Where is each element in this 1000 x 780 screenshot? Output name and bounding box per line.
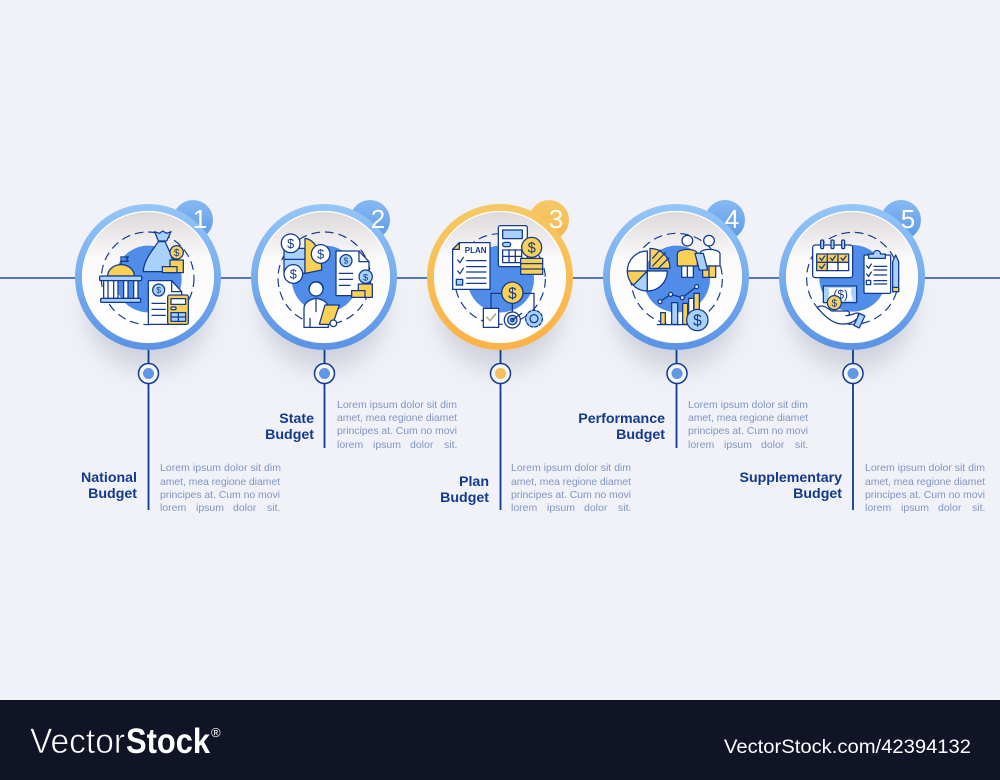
text block: Performance Budget: amet, mea regione diamet (688, 412, 808, 424)
text block: State Budget (337, 399, 457, 451)
timeline connector line (0, 277, 1000, 279)
heading: State Budget: State (279, 411, 314, 427)
text block: State Budget: principes at. Cum no movi (337, 425, 457, 437)
text block: Plan Budget: sit. (618, 502, 631, 514)
panel: State Budget (251, 200, 457, 451)
ring with white disc (427, 204, 573, 350)
text block: Supplementary Budget: lorem (865, 502, 892, 514)
text block: State Budget: lorem (337, 439, 364, 451)
icon: bank, money bag and calculator: $ (156, 285, 161, 295)
text block: Plan Budget: amet, mea regione diamet (511, 476, 631, 488)
text block: National Budget (160, 462, 281, 514)
number 4: 4 (725, 204, 739, 234)
text block: Supplementary Budget: dolor (938, 502, 962, 514)
icon: bank, money bag and calculator (100, 231, 194, 325)
text block: Supplementary Budget: amet, mea regione diamet (865, 476, 985, 488)
panel: National Budget (75, 200, 281, 514)
icon: plan, calculator and goals: PLAN (465, 246, 487, 255)
icon: pie of money, document and officer: $ (287, 237, 294, 251)
icon: calendar, checklist and money in hand (807, 232, 899, 328)
text block: Performance Budget: principes at. Cum no movi (688, 425, 808, 437)
text block: Plan Budget: ipsum (547, 502, 575, 514)
number badge 3 (529, 200, 569, 240)
icon: pie of money, document and officer (278, 232, 372, 327)
timeline node 3 (490, 364, 510, 384)
icon: pie chart, team and bar chart (627, 233, 722, 331)
number 1: 1 (193, 204, 207, 234)
icon: pie of money, document and officer: $ (344, 256, 349, 266)
text block: State Budget: amet, mea regione diamet (337, 412, 457, 424)
icon: calendar, checklist and money in hand: $ (832, 299, 838, 310)
text block: Supplementary Budget: principes at. Cum no movi (865, 489, 985, 501)
footer logo (30, 722, 210, 761)
number badge 4 (705, 200, 745, 240)
text block: Performance Budget: lorem (688, 439, 715, 451)
icon: pie chart, team and bar chart: $ (693, 313, 702, 330)
icon: plan, calculator and goals: $ (528, 241, 536, 257)
number badge 2 (350, 200, 390, 240)
heading: Supplementary Budget: Supplementary (740, 470, 842, 486)
heading: National Budget: Budget (88, 486, 137, 502)
text block: Performance Budget (688, 399, 808, 451)
text block: National Budget: Lorem ipsum dolor sit dim (160, 462, 281, 474)
text block: State Budget: dolor (410, 439, 434, 451)
heading: Plan Budget: Plan (459, 474, 489, 490)
icon: pie of money, document and officer: $ (363, 272, 369, 282)
text block: State Budget: sit. (444, 439, 457, 451)
icon: bank, money bag and calculator: $ (174, 248, 180, 259)
text block: Supplementary Budget: Lorem ipsum dolor sit dim (865, 462, 985, 474)
text block: Plan Budget: dolor (584, 502, 608, 514)
heading: State Budget: Budget (265, 427, 314, 443)
registered mark: ® (211, 725, 221, 740)
text block: National Budget: dolor (233, 502, 257, 514)
footer bar (0, 700, 1000, 780)
ring with white disc (779, 204, 925, 350)
icon: pie of money, document and officer: $ (290, 268, 297, 282)
number 2: 2 (371, 204, 385, 234)
icon: pie of money, document and officer: $ (317, 248, 324, 262)
text block: Performance Budget: ipsum (724, 439, 752, 451)
panel: Plan Budget (427, 200, 631, 514)
panel: Performance Budget (578, 200, 808, 451)
text block: Performance Budget: sit. (795, 439, 808, 451)
text block: Supplementary Budget: sit. (972, 502, 985, 514)
text block: Plan Budget: Lorem ipsum dolor sit dim (511, 462, 631, 474)
footer logo: Vector (30, 722, 125, 761)
number 5: 5 (901, 204, 915, 234)
icon: calendar, checklist and money in hand: ($) (833, 288, 848, 302)
text block: Performance Budget: Lorem ipsum dolor sit dim (688, 399, 808, 411)
number 3: 3 (549, 204, 563, 234)
text block: State Budget: Lorem ipsum dolor sit dim (337, 399, 457, 411)
timeline node 4 (667, 364, 687, 384)
icon: plan, calculator and goals: $ (508, 285, 517, 302)
number badge 5 (881, 200, 921, 240)
heading: Supplementary Budget: Budget (793, 486, 842, 502)
timeline node 5 (843, 364, 863, 384)
ring with white disc (603, 204, 749, 350)
icon: plan, calculator and goals (453, 226, 545, 328)
text block: Plan Budget: principes at. Cum no movi (511, 489, 631, 501)
text block: Plan Budget (511, 462, 631, 514)
panel: Supplementary Budget (740, 200, 985, 514)
footer logo: Stock (126, 722, 210, 761)
text block: National Budget: principes at. Cum no movi (160, 489, 280, 501)
text block: National Budget: lorem (160, 502, 187, 514)
heading: Performance Budget: Budget (616, 427, 665, 443)
number badge 1 (173, 200, 213, 240)
heading: National Budget: National (81, 470, 137, 486)
text block: National Budget: ipsum (196, 502, 224, 514)
heading: Plan Budget: Budget (440, 490, 489, 506)
timeline node 2 (314, 364, 334, 384)
ring with white disc (75, 204, 221, 350)
text block: Plan Budget: lorem (511, 502, 538, 514)
text block: Supplementary Budget: ipsum (901, 502, 929, 514)
text block: Performance Budget: dolor (761, 439, 785, 451)
text block: State Budget: ipsum (373, 439, 401, 451)
text block: National Budget: sit. (267, 502, 280, 514)
heading: Performance Budget: Performance (578, 411, 665, 427)
footer image id: VectorStock.com/42394132 (724, 737, 971, 758)
ring with white disc (251, 204, 397, 350)
timeline node 1 (138, 364, 158, 384)
text block: National Budget: amet, mea regione diamet (160, 476, 280, 488)
text block: Supplementary Budget (865, 462, 985, 514)
